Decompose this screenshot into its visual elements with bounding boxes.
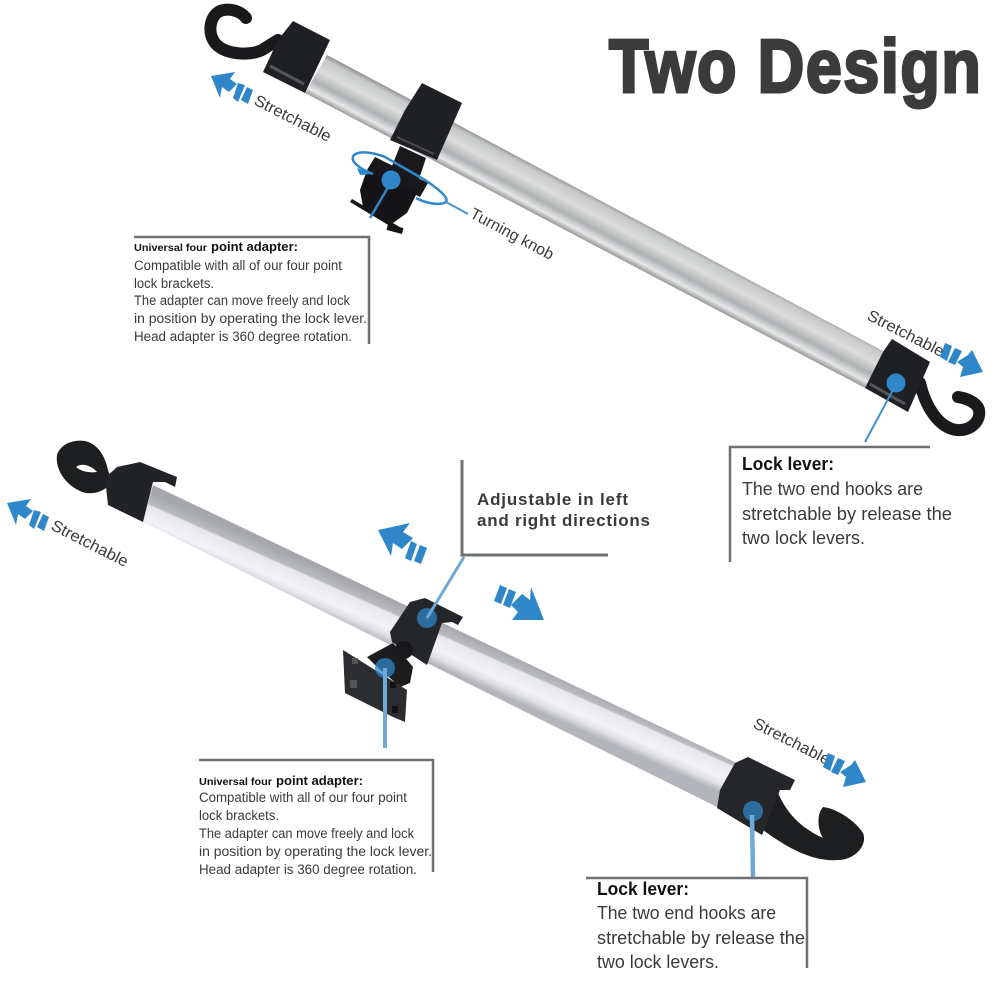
panel: top adapter note: The adapter can move freely and lock — [134, 293, 350, 308]
top left stretch arrow — [211, 72, 253, 104]
top rail tube — [305, 55, 885, 388]
top left hook — [210, 10, 278, 54]
centre pointer — [417, 557, 464, 628]
label: turning knob: Turning knob — [467, 206, 556, 264]
panel: bottom adapter note: Head adapter is 360 degree rotation. — [199, 862, 417, 877]
panel: bottom adapter note: The adapter can move freely and lock — [199, 826, 414, 841]
bottom mount plate — [343, 641, 413, 722]
bottom left ring hook — [57, 441, 112, 493]
panel: top adapter note: point adapter: — [211, 240, 298, 254]
top right clamp — [865, 339, 930, 442]
panel: bottom adapter note — [199, 760, 433, 877]
panel: bottom adapter note: Compatible with all of our four point — [199, 790, 407, 805]
panel: top lock lever note: stretchable by release the — [742, 503, 952, 524]
label: bottom right stretchable: Stretchable — [750, 715, 833, 769]
bottom rail tube — [143, 485, 737, 807]
panel: top lock lever note: two lock levers. — [742, 527, 865, 548]
bottom centre clamp — [390, 598, 463, 665]
top centre clamp — [390, 83, 462, 160]
turning knob adapter — [350, 146, 468, 234]
panel: adjustable note: and right directions — [477, 511, 650, 530]
panel: top adapter note: lock brackets. — [134, 276, 214, 291]
panel: top adapter note: Head adapter is 360 degree rotation. — [134, 329, 352, 344]
bottom left stretch arrow — [7, 499, 49, 531]
panel: top lock lever note: Lock lever: — [742, 454, 834, 474]
left direction arrow — [378, 523, 427, 564]
bottom rail product — [57, 441, 864, 878]
panel: adjustable note — [462, 460, 650, 555]
panel: top lock lever note — [730, 447, 952, 562]
panel: adjustable note: Adjustable in left — [477, 490, 628, 509]
panel: bottom lock lever note: two lock levers. — [597, 951, 719, 972]
lock lever pointer — [743, 801, 763, 878]
bottom right stretch arrow — [823, 753, 866, 787]
bottom right hook — [763, 793, 864, 860]
bottom right clamp — [717, 757, 795, 835]
panel: top adapter note — [134, 237, 369, 344]
panel: bottom lock lever note: Lock lever: — [597, 879, 689, 899]
panel: bottom adapter note: Universal four — [199, 777, 272, 788]
top right hook — [920, 383, 979, 430]
panel: bottom lock lever note — [586, 878, 807, 972]
panel: top adapter note: Compatible with all of our four point — [134, 258, 342, 273]
panel: bottom adapter note: lock brackets. — [199, 808, 279, 823]
panel: top adapter note: Universal four — [134, 243, 207, 254]
panel: top adapter note: in position by operating the lock lever. — [134, 311, 367, 326]
adapter pointer — [375, 658, 395, 748]
top left clamp — [263, 21, 330, 93]
title: Two Design — [609, 24, 982, 108]
label: top right stretchable: Stretchable — [864, 307, 947, 361]
top right stretch arrow — [940, 343, 983, 377]
bottom left clamp — [105, 462, 177, 522]
panel: bottom adapter note: point adapter: — [276, 774, 363, 788]
label: top left stretchable: Stretchable — [251, 92, 334, 146]
panel: bottom lock lever note: stretchable by release the — [597, 927, 805, 948]
top rail product — [210, 10, 979, 442]
right direction arrow — [494, 585, 544, 620]
panel: top lock lever note: The two end hooks are — [742, 478, 923, 499]
panel: bottom adapter note: in position by operating the lock lever. — [199, 844, 432, 859]
panel: bottom lock lever note: The two end hooks are — [597, 902, 776, 923]
label: bottom left stretchable: Stretchable — [48, 517, 131, 571]
